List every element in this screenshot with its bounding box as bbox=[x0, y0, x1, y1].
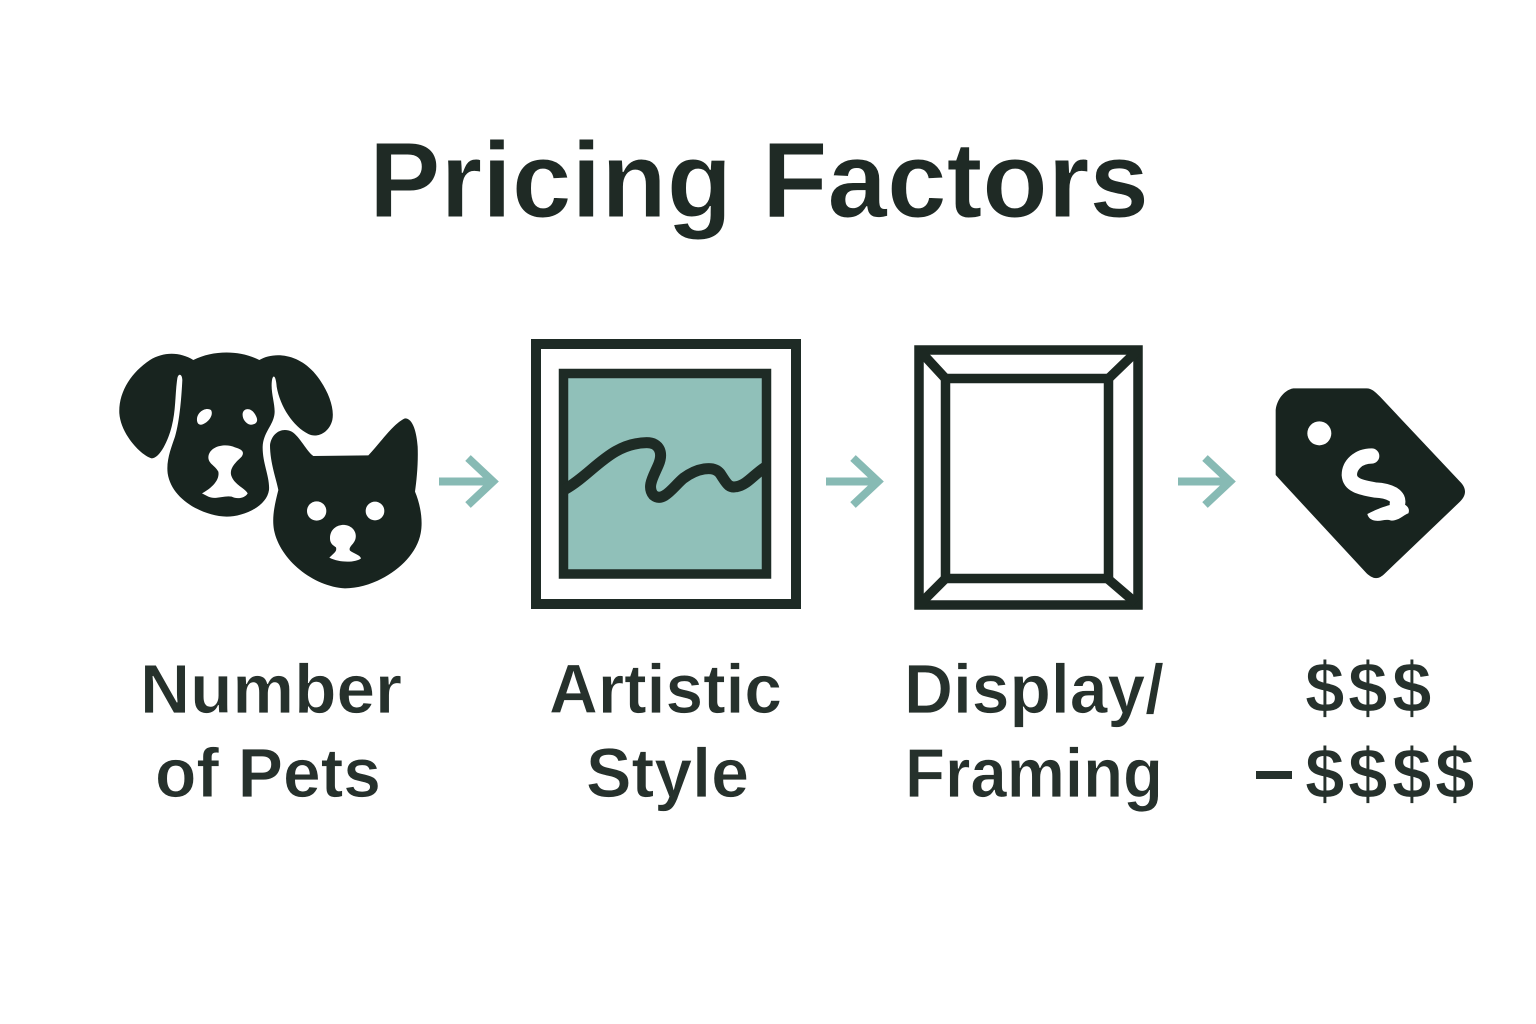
icon: cat bbox=[270, 418, 422, 588]
arrow: framing to price bbox=[1178, 458, 1230, 505]
label: artistic style: Style bbox=[586, 734, 749, 812]
label: number of pets: Number bbox=[140, 650, 402, 728]
label: price range: $$$ bbox=[1305, 649, 1432, 728]
label: price range: $$$$ bbox=[1305, 735, 1474, 814]
wave line bbox=[565, 443, 765, 497]
icon: framed artwork bbox=[536, 344, 796, 604]
arrow: style to framing bbox=[826, 458, 878, 505]
label: number of pets bbox=[140, 650, 402, 812]
icon: dog bbox=[119, 352, 333, 517]
title: Pricing Factors bbox=[369, 119, 1149, 240]
icon: picture frame bbox=[919, 350, 1138, 605]
label: display framing: Framing bbox=[905, 734, 1163, 812]
label: number of pets: of Pets bbox=[155, 734, 381, 812]
arrow: pets to style bbox=[439, 458, 493, 505]
label: artistic style bbox=[549, 650, 782, 812]
label: artistic style: Artistic bbox=[549, 650, 782, 728]
icon: price tag bbox=[1276, 388, 1465, 578]
label: price range bbox=[1256, 649, 1474, 814]
label: display framing: Display/ bbox=[904, 650, 1164, 728]
label: display framing bbox=[904, 650, 1164, 812]
icon: dog and cat faces bbox=[119, 352, 422, 588]
dollar symbol bbox=[1349, 456, 1409, 521]
